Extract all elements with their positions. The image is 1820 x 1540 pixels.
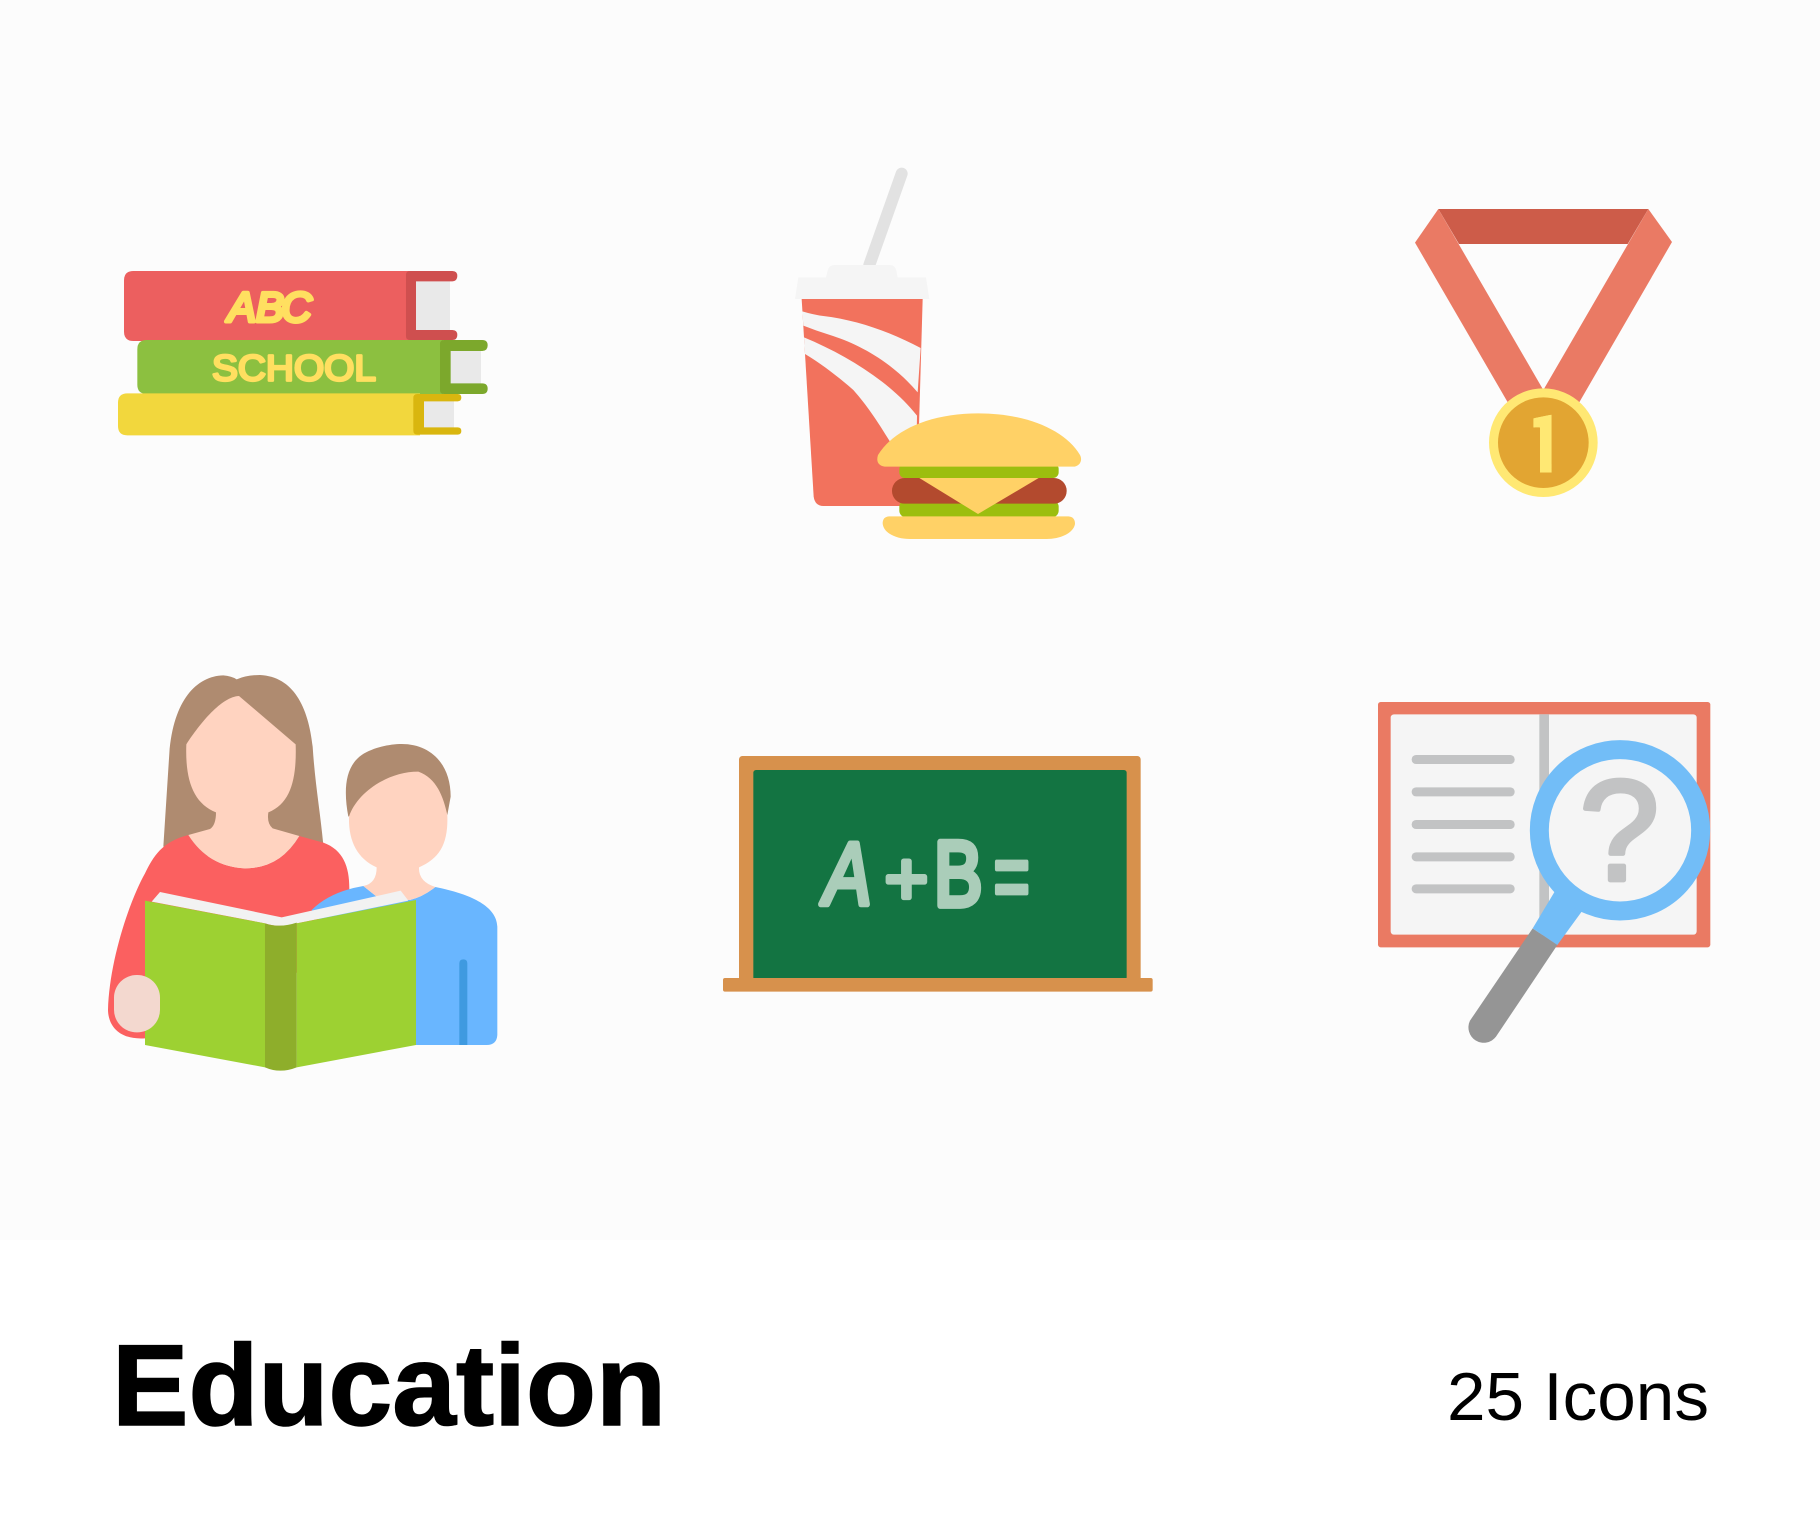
boy head [346, 744, 451, 900]
green book [137, 340, 488, 394]
boy body [312, 886, 497, 1045]
magnifying glass: ? [1579, 751, 1659, 911]
ribbon [1415, 209, 1672, 403]
book cover [1378, 702, 1710, 947]
chalk equation: B [934, 823, 982, 925]
chalk equation: A [820, 825, 871, 924]
soda cup [795, 174, 929, 506]
book pages [1391, 714, 1697, 935]
yellow book [118, 393, 461, 435]
panel: footer [0, 1240, 1820, 1540]
woman face [186, 696, 299, 868]
icon: soda cup and burger [795, 174, 1081, 539]
open book [145, 891, 416, 1071]
icon: chalkboard [723, 756, 1153, 992]
hand [114, 975, 160, 1032]
medal disc: 1 [1519, 398, 1566, 491]
board frame [739, 756, 1141, 983]
icon: gold medal [1415, 209, 1672, 497]
red book [124, 271, 457, 341]
woman hair [163, 675, 323, 863]
title: Education [112, 1322, 666, 1450]
icon: stack of school books [118, 271, 488, 435]
green board [753, 770, 1127, 980]
burger [877, 413, 1081, 539]
medal disc [1489, 388, 1598, 497]
icon: parent and child reading a book [108, 675, 497, 1071]
red book: ABC [225, 283, 312, 330]
icon count label: 25 Icons [1447, 1359, 1709, 1435]
chalk equation: + [885, 836, 928, 920]
chalk equation: = [993, 822, 1030, 930]
woman body [108, 835, 349, 1038]
green book: SCHOOL [212, 348, 376, 389]
text lines [1412, 755, 1515, 893]
chalk equation [820, 822, 1030, 930]
magnifying glass [1468, 750, 1701, 1043]
chalk tray [723, 978, 1153, 992]
icon: open book with magnifying glass [1378, 702, 1710, 1043]
